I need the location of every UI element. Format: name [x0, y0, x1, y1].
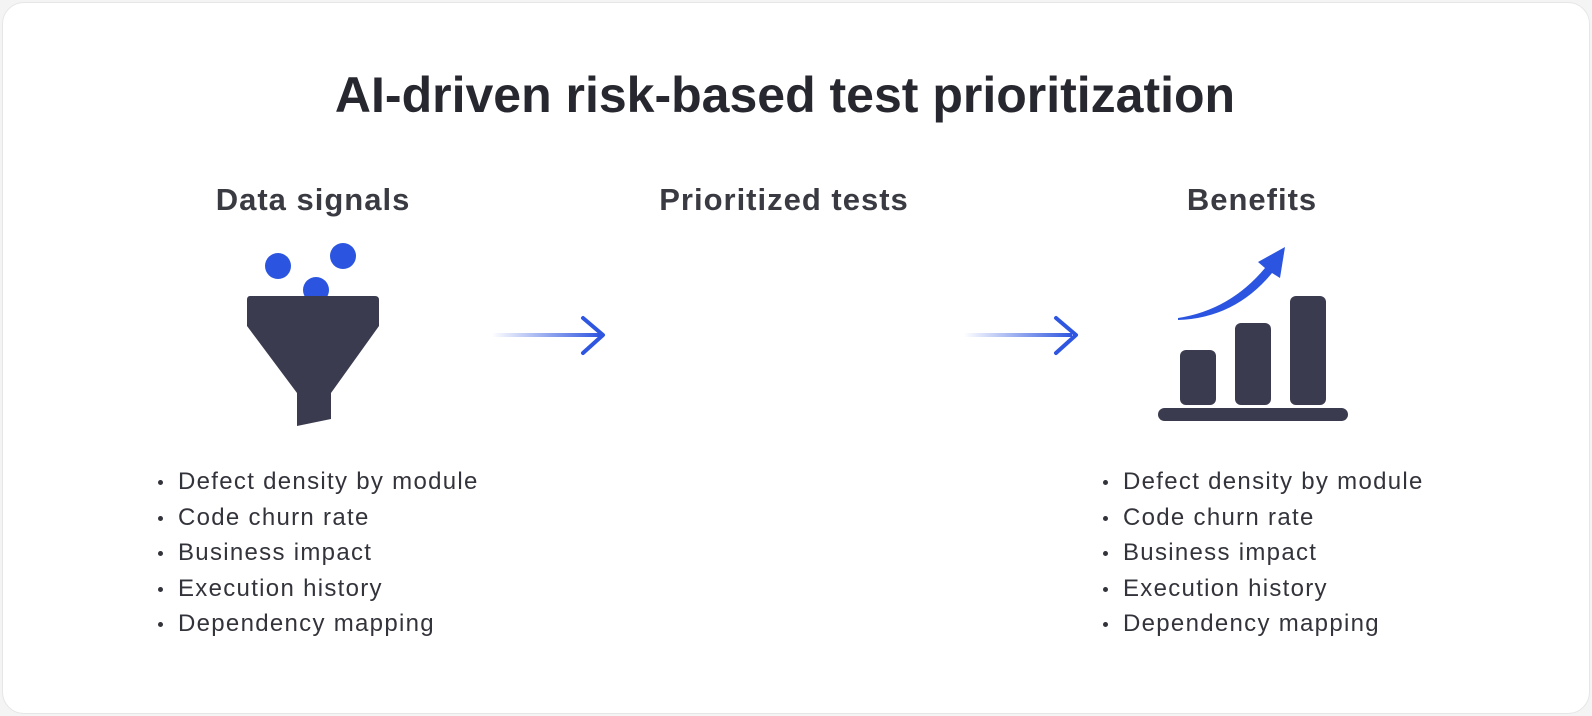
heading: prioritized tests: Prioritized tests — [659, 182, 909, 217]
arrow 2 — [964, 318, 1076, 353]
list: benefits — [1103, 468, 1424, 637]
list: data signals: Defect density by module — [178, 468, 479, 495]
arrow 1 — [492, 318, 603, 353]
icon: funnel — [247, 243, 379, 426]
list: data signals — [158, 468, 479, 637]
list: benefits: Code churn rate — [1123, 504, 1315, 530]
list: benefits: Execution history — [1123, 574, 1328, 602]
list: data signals: Business impact — [178, 539, 372, 566]
icon: bar chart — [1158, 247, 1348, 421]
list: data signals: Dependency mapping — [178, 610, 435, 637]
heading: benefits: Benefits — [1187, 182, 1317, 217]
list: benefits: Defect density by module — [1123, 468, 1424, 495]
list: benefits: Dependency mapping — [1123, 610, 1380, 637]
list: data signals: Execution history — [178, 574, 383, 602]
heading: data signals: Data signals — [216, 182, 410, 217]
list: data signals: Code churn rate — [178, 504, 370, 530]
title: AI-driven risk-based test prioritization — [335, 67, 1235, 123]
list: benefits: Business impact — [1123, 539, 1317, 566]
